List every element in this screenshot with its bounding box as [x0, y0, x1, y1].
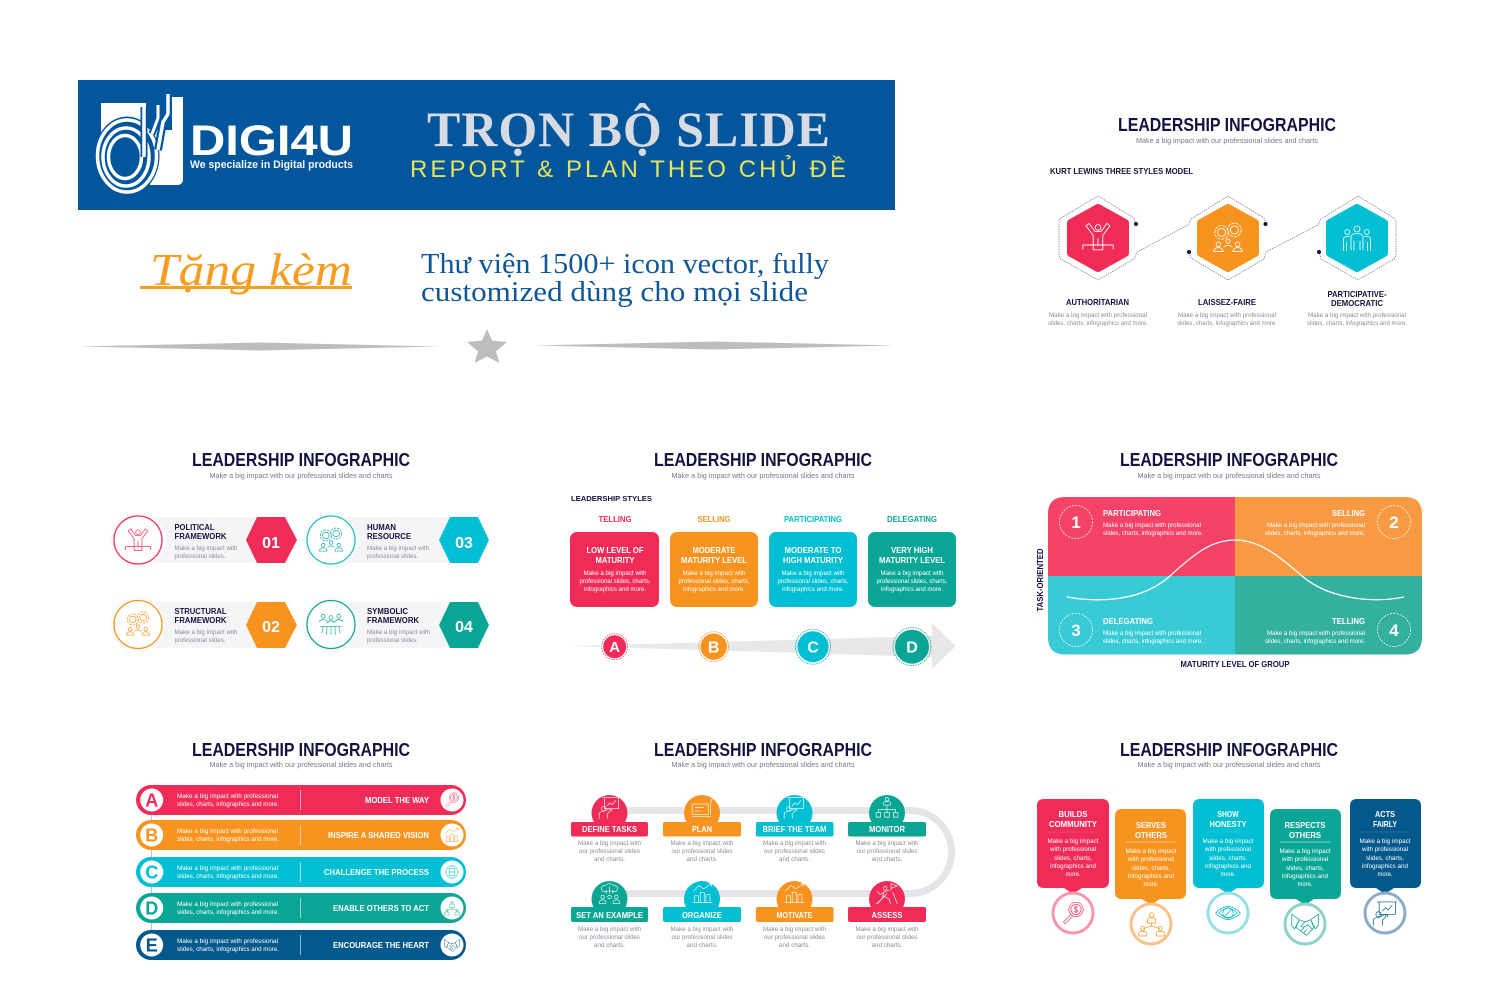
step: define tasks	[571, 795, 648, 863]
step: plan: PLAN	[692, 824, 712, 834]
card: telling: MATURITY	[596, 555, 635, 565]
card: participating: Make a big impact with	[782, 570, 845, 577]
panel: eight-step roadmap	[571, 740, 951, 949]
step: assess	[848, 881, 926, 949]
heading: Make a big impact with our professional slides and charts	[672, 471, 855, 480]
icon: presenter at board	[1365, 893, 1405, 933]
style: participative-democratic	[1307, 289, 1407, 327]
card: builds community: infographics and	[1050, 863, 1096, 870]
style: participative-democratic: PARTICIPATIVE-	[1328, 289, 1387, 299]
roadmap track	[610, 810, 951, 894]
framework 04	[303, 596, 489, 652]
row A: A	[145, 790, 158, 810]
heading	[192, 450, 410, 480]
card: builds community: COMMUNITY	[1049, 819, 1097, 829]
framework 01: professional slides.	[174, 553, 226, 560]
quadrant fills	[1048, 497, 1422, 654]
card: telling: infographics and more.	[584, 586, 646, 593]
row D: D	[145, 898, 158, 918]
quadrant 4: 4	[1389, 621, 1399, 640]
heading	[192, 740, 410, 769]
step: plan	[663, 795, 741, 863]
style: authoritarian: Make a big impact with professional	[1049, 312, 1148, 319]
heading: LEADERSHIP INFOGRAPHIC	[654, 450, 872, 470]
heading: Make a big impact with our professional slides and charts	[1138, 471, 1321, 480]
row A: slides, charts, infographics and more.	[177, 801, 279, 808]
banner	[78, 80, 895, 210]
card: participating	[769, 515, 857, 607]
step: set an example: and charts.	[594, 942, 625, 949]
marker B	[699, 632, 729, 662]
row E: Make a big impact with professional	[177, 938, 278, 945]
heading: LEADERSHIP INFOGRAPHIC	[192, 740, 410, 760]
heading	[1120, 450, 1338, 480]
framework 04: 04	[455, 619, 473, 636]
framework 02: FRAMEWORK	[174, 616, 227, 625]
card: acts fairly: infographics and	[1362, 863, 1408, 870]
card: respects others: more.	[1298, 881, 1313, 888]
step: organize: ORGANIZE	[682, 910, 722, 920]
quadrant 4: slides, charts, infographics and more.	[1265, 638, 1365, 645]
step: motivate: Make a big impact with	[763, 926, 826, 933]
heading: LEADERSHIP INFOGRAPHIC	[1120, 740, 1338, 760]
quadrant 4: TELLING	[1332, 616, 1365, 626]
row B: B	[145, 826, 158, 846]
card: serves others: OTHERS	[1135, 830, 1167, 840]
step: motivate: our professional slides	[764, 934, 826, 941]
panel: five practices	[136, 740, 466, 960]
quadrant 2: slides, charts, infographics and more.	[1265, 530, 1365, 537]
card: show honesty: Make a big impact	[1202, 838, 1254, 845]
card: builds community: more.	[1066, 871, 1081, 878]
card: acts fairly	[1350, 799, 1421, 894]
heading: LEADERSHIP INFOGRAPHIC	[654, 740, 872, 760]
heading	[1118, 115, 1336, 145]
heading	[1120, 740, 1338, 769]
step: plan: and charts.	[686, 856, 718, 863]
quadrant 2	[1265, 506, 1410, 538]
step: organize	[663, 881, 741, 949]
card: participating: professional slides, charts,	[778, 578, 849, 585]
step: brief the team: our professional slides	[764, 848, 826, 855]
card: selling: MATURITY LEVEL	[681, 555, 747, 565]
card: serves others: more.	[1144, 881, 1159, 888]
banner subheadline: REPORT & PLAN THEO CHỦ ĐỀ	[410, 154, 846, 183]
framework 01: POLITICAL	[174, 523, 215, 532]
marker D	[893, 628, 931, 666]
row D: slides, charts, infographics and more.	[177, 909, 279, 916]
card: delegating: MATURITY LEVEL	[879, 555, 945, 565]
card: delegating: professional slides, charts,	[876, 578, 948, 585]
bell curve	[1067, 540, 1404, 600]
row B	[136, 820, 466, 850]
bonus description: Thư viện 1500+ icon vector, fully	[421, 249, 829, 280]
bonus description	[421, 249, 829, 308]
card: serves others: infographics and	[1128, 873, 1174, 880]
card: selling: Make a big impact with	[682, 570, 746, 577]
heading: Make a big impact with our professional slides and charts	[210, 471, 393, 480]
step: assess: Make a big impact with	[856, 926, 919, 933]
card: selling: infographics and more.	[683, 586, 745, 593]
bonus script label: Tặng kèm	[150, 244, 352, 295]
section label: LEADERSHIP STYLES	[571, 494, 652, 503]
card: builds community: slides, charts,	[1054, 855, 1092, 862]
card: builds community: Make a big impact	[1048, 838, 1099, 845]
star divider	[79, 329, 895, 363]
row B: Make a big impact with professional	[177, 828, 278, 835]
card: delegating: DELEGATING	[887, 515, 937, 524]
card: show honesty: SHOW	[1218, 809, 1239, 819]
card: respects others: with professional	[1281, 856, 1328, 863]
card: telling	[570, 515, 659, 607]
x axis label: MATURITY LEVEL OF GROUP	[1180, 659, 1290, 669]
step: set an example: our professional slides	[579, 934, 641, 941]
marker C	[796, 629, 830, 664]
style: laissez-faire: slides, charts, infographics and more.	[1177, 320, 1277, 327]
card: telling: professional slides, charts,	[580, 578, 651, 585]
card: telling: Make a big impact with	[584, 570, 647, 577]
heading: LEADERSHIP INFOGRAPHIC	[1118, 115, 1336, 135]
quadrant 2: SELLING	[1332, 508, 1365, 518]
heading	[654, 450, 872, 480]
heading	[654, 740, 872, 769]
card: show honesty: slides, charts,	[1209, 855, 1247, 862]
row C: CHALLENGE THE PROCESS	[324, 867, 429, 877]
framework 04: Make a big impact with	[367, 629, 430, 636]
row D: Make a big impact with professional	[177, 901, 278, 908]
framework 02: professional slides.	[174, 637, 226, 644]
card: respects others: OTHERS	[1289, 830, 1321, 840]
framework 03: RESOURCE	[367, 532, 412, 541]
row C	[136, 857, 466, 887]
card: serves others: Make a big impact	[1126, 848, 1177, 855]
marker A	[600, 632, 630, 662]
row A	[136, 785, 466, 815]
bonus description: customized dùng cho mọi slide	[421, 277, 808, 308]
framework 01: FRAMEWORK	[174, 532, 227, 541]
row C: C	[145, 862, 158, 882]
row C: slides, charts, infographics and more.	[177, 873, 279, 880]
card: respects others: Make a big impact	[1280, 848, 1331, 855]
marker B: B	[708, 640, 719, 656]
framework 03: professional slides.	[367, 553, 418, 560]
step: monitor: MONITOR	[869, 824, 905, 834]
row E: E	[146, 936, 158, 956]
step: plan: Make a big impact with	[670, 840, 734, 847]
quadrant 3: 3	[1071, 621, 1081, 640]
card: acts fairly: ACTS	[1375, 809, 1395, 819]
arrow: maturity progression	[570, 623, 956, 669]
quadrant 2: Make a big impact with professional	[1267, 522, 1365, 529]
step: motivate: MOTIVATE	[776, 910, 813, 920]
quadrant 2: 2	[1389, 513, 1399, 532]
heading: Make a big impact with our professional slides and charts	[1138, 760, 1321, 769]
style: authoritarian: AUTHORITARIAN	[1066, 297, 1129, 307]
row A: Make a big impact with professional	[177, 793, 278, 800]
step: define tasks: our professional slides	[579, 848, 641, 855]
panel: Kurt Lewin three styles	[1048, 115, 1407, 327]
style: authoritarian: slides, charts, infographics and more.	[1048, 320, 1148, 327]
heading: Make a big impact with our professional slides and charts	[210, 760, 393, 769]
step: organize: and charts.	[686, 942, 718, 949]
card: acts fairly: FAIRLY	[1373, 819, 1397, 829]
framework 04: professional slides.	[367, 637, 418, 644]
card: telling: TELLING	[598, 515, 632, 524]
framework 01: 01	[262, 535, 280, 552]
style: participative-democratic: slides, charts, infographics and more.	[1307, 320, 1407, 327]
framework 03	[303, 512, 489, 568]
card: selling: SELLING	[698, 515, 730, 524]
y axis label: TASK-ORIENTED	[1036, 548, 1045, 612]
panel: leader qualities	[1037, 740, 1421, 944]
step: set an example	[571, 881, 648, 949]
marker C: C	[807, 640, 819, 656]
row E	[136, 930, 466, 960]
step: assess: our professional slides	[856, 934, 918, 941]
row B: slides, charts, infographics and more.	[177, 836, 279, 843]
heading: Make a big impact with our professional slides and charts	[1136, 136, 1318, 145]
logo wordmark: We specialize in Digital products	[190, 159, 353, 171]
row D: ENABLE OTHERS TO ACT	[333, 903, 430, 913]
card: respects others: slides, charts,	[1286, 865, 1324, 872]
card: acts fairly: slides, charts,	[1366, 855, 1404, 862]
step: monitor: and charts.	[872, 856, 903, 863]
card: show honesty	[1193, 799, 1264, 894]
row E: ENCOURAGE THE HEART	[333, 940, 430, 950]
card: show honesty: more.	[1220, 871, 1236, 878]
card: serves others: with professional	[1127, 856, 1174, 863]
card: show honesty: with professional	[1204, 846, 1251, 853]
step: brief the team: BRIEF THE TEAM	[762, 824, 826, 834]
framework 03: 03	[455, 535, 473, 552]
card: builds community: with professional	[1049, 846, 1096, 853]
framework 02: STRUCTURAL	[174, 607, 227, 616]
step: plan: our professional slides	[672, 848, 733, 855]
quadrant 1: 1	[1071, 513, 1081, 532]
step: brief the team	[756, 795, 834, 863]
style: laissez-faire: LAISSEZ-FAIRE	[1198, 297, 1256, 307]
card: selling	[670, 515, 758, 607]
card: delegating: infographics and more.	[881, 586, 943, 593]
card: respects others	[1270, 809, 1341, 905]
framework 02: 02	[262, 619, 280, 636]
style: participative-democratic: Make a big impact with professional	[1308, 312, 1407, 319]
banner headline: TRỌN BỘ SLIDE	[427, 101, 830, 157]
card: acts fairly: with professional	[1361, 846, 1408, 853]
panel: four frameworks	[110, 450, 489, 652]
framework 04: FRAMEWORK	[367, 616, 419, 625]
card: delegating: Make a big impact with	[880, 570, 944, 577]
quadrant 3: slides, charts, infographics and more.	[1103, 638, 1203, 645]
row A: MODEL THE WAY	[365, 795, 429, 805]
dashed hexagon connectors	[1059, 196, 1396, 280]
heading: Make a big impact with our professional slides and charts	[672, 760, 855, 769]
framework 01: Make a big impact with	[174, 545, 238, 552]
step: define tasks: DEFINE TASKS	[582, 824, 637, 834]
icon: DIGI4U logo mark	[94, 94, 183, 196]
card: show honesty: HONESTY	[1210, 819, 1247, 829]
marker A: A	[609, 639, 620, 656]
step: brief the team: and charts.	[779, 856, 810, 863]
quadrant 1: slides, charts, infographics and more.	[1103, 530, 1203, 537]
panel: situational quadrant	[1036, 450, 1422, 669]
quadrant 1	[1060, 506, 1203, 538]
card: participating: infographics and more.	[782, 586, 844, 593]
step: assess: ASSESS	[872, 910, 903, 920]
card: participating: MODERATE TO	[784, 545, 842, 555]
heading: LEADERSHIP INFOGRAPHIC	[1120, 450, 1338, 470]
framework 03: HUMAN	[367, 523, 396, 532]
quadrant 1: PARTICIPATING	[1103, 508, 1161, 518]
row E: slides, charts, infographics and more.	[177, 946, 279, 953]
step: organize: Make a big impact with	[670, 926, 734, 933]
card: delegating: VERY HIGH	[891, 545, 933, 555]
step: motivate	[756, 881, 834, 949]
step: monitor: Make a big impact with	[856, 840, 919, 847]
quadrant 4	[1265, 614, 1410, 646]
step: set an example: SET AN EXAMPLE	[576, 910, 643, 920]
row B: INSPIRE A SHARED VISION	[328, 830, 429, 840]
style: laissez-faire	[1177, 297, 1277, 327]
hexagon: participative-democratic	[1330, 208, 1384, 268]
card: selling: MODERATE	[692, 545, 736, 555]
card: telling: LOW LEVEL OF	[586, 545, 644, 555]
quadrant 3: DELEGATING	[1103, 616, 1153, 626]
step: define tasks: and charts.	[594, 856, 625, 863]
quadrant 3: Make a big impact with professional	[1103, 630, 1201, 637]
card: participating: HIGH MATURITY	[783, 555, 843, 565]
style: laissez-faire: Make a big impact with professional	[1178, 312, 1277, 319]
card: respects others: RESPECTS	[1284, 820, 1326, 830]
card: builds community: BUILDS	[1058, 809, 1088, 819]
framework 01	[110, 512, 297, 568]
icon: org chart	[1131, 904, 1171, 944]
step: set an example: Make a big impact with	[578, 926, 641, 933]
heading: LEADERSHIP INFOGRAPHIC	[192, 450, 410, 470]
framework 02	[110, 596, 297, 652]
step: monitor: our professional slides	[856, 848, 918, 855]
section label: KURT LEWINS THREE STYLES MODEL	[1050, 166, 1193, 176]
logo wordmark: DIGI4U	[190, 117, 353, 165]
quadrant 4: Make a big impact with professional	[1267, 630, 1365, 637]
hexagon: laissez-faire	[1201, 208, 1255, 268]
card: participating: PARTICIPATING	[784, 515, 842, 524]
style: participative-democratic: DEMOCRATIC	[1331, 298, 1383, 308]
marker D: D	[906, 640, 918, 656]
card: respects others: infographics and	[1282, 873, 1328, 880]
step: define tasks: Make a big impact with	[578, 840, 641, 847]
card: selling: professional slides, charts,	[678, 578, 750, 585]
style: authoritarian	[1048, 297, 1148, 327]
row C: Make a big impact with professional	[177, 865, 278, 872]
card: serves others: slides, charts,	[1132, 865, 1170, 872]
panel: leadership styles	[570, 450, 956, 669]
card: serves others: SERVES	[1136, 820, 1166, 830]
card: builds community	[1037, 799, 1109, 894]
hexagon: authoritarian	[1071, 208, 1125, 268]
card: show honesty: infographics and	[1205, 863, 1251, 870]
framework 02: Make a big impact with	[174, 629, 238, 636]
icon: handshake	[1285, 904, 1325, 944]
step: organize: our professional slides	[672, 934, 733, 941]
step: monitor	[848, 795, 926, 863]
icon: eye	[1208, 893, 1248, 933]
framework 04: SYMBOLIC	[367, 607, 408, 616]
step: brief the team: Make a big impact with	[763, 840, 826, 847]
row D	[136, 893, 466, 923]
icon: magnifier with dollar	[1053, 893, 1093, 933]
framework 03: Make a big impact with	[367, 545, 429, 552]
step: motivate: and charts.	[779, 942, 810, 949]
quadrant 3	[1060, 614, 1203, 646]
card: acts fairly: more.	[1378, 871, 1393, 878]
card: delegating	[868, 515, 956, 607]
card: serves others	[1115, 809, 1186, 905]
step: assess: and charts.	[872, 942, 903, 949]
quadrant 1: Make a big impact with professional	[1103, 522, 1201, 529]
card: acts fairly: Make a big impact	[1360, 838, 1411, 845]
